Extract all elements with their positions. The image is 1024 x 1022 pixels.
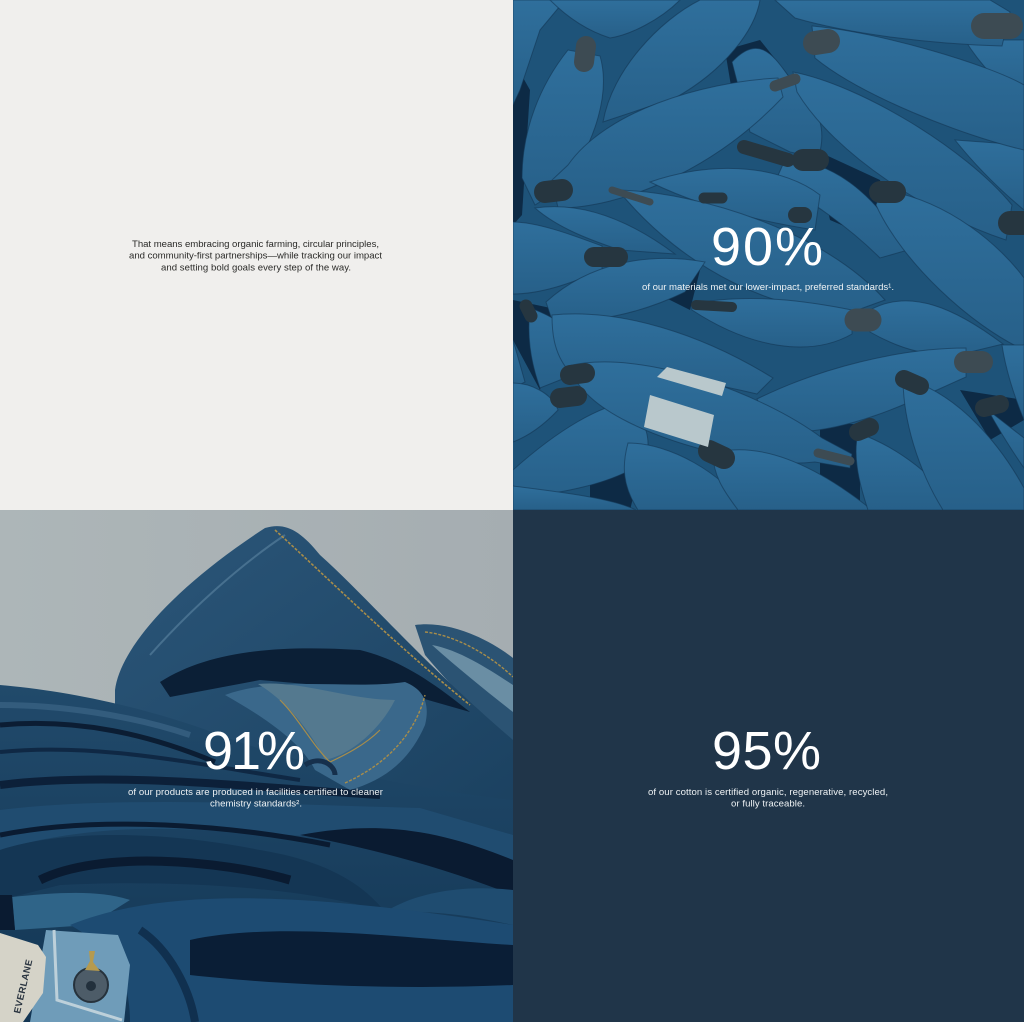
caption: 91% products: of our products are produced in facilities certified to cleaner [128, 787, 384, 798]
caption: 95% cotton [648, 787, 888, 810]
photo: yarn spools [513, 0, 1024, 510]
panel: blue yarn spools photo with 90% statistic [513, 0, 1024, 510]
caption: 91% products: chemistry standards². [210, 798, 302, 810]
panel: folded denim jeans photo with 91% statistic [0, 510, 513, 1022]
caption: 91% products [128, 787, 384, 810]
intro paragraph: and community-first partnerships—while tracking our impact [129, 250, 382, 262]
intro paragraph [129, 239, 382, 274]
caption: 95% cotton: or fully traceable. [731, 798, 805, 810]
spool paper labels [644, 367, 726, 447]
stat: 95%: 95% [712, 721, 821, 781]
photo: jeans pocket, label and rivet [0, 930, 130, 1022]
brand label text: EVERLANE [12, 959, 35, 1015]
panel: navy with 95% statistic [513, 510, 1024, 1022]
stat: 91%: 91% [203, 721, 305, 781]
panel: intro text on light background [0, 0, 513, 510]
stat: 90%: 90% [711, 217, 823, 277]
caption: 95% cotton: of our cotton is certified organic, regenerative, recycled, [648, 787, 888, 798]
intro paragraph: and setting bold goals every step of the way. [161, 262, 351, 274]
intro paragraph: That means embracing organic farming, circular principles, [132, 239, 379, 250]
caption: 90% materials: of our materials met our lower-impact, preferred standards¹. [642, 282, 894, 293]
spool end caps [526, 26, 1024, 461]
photo: folded jeans [0, 526, 513, 1022]
